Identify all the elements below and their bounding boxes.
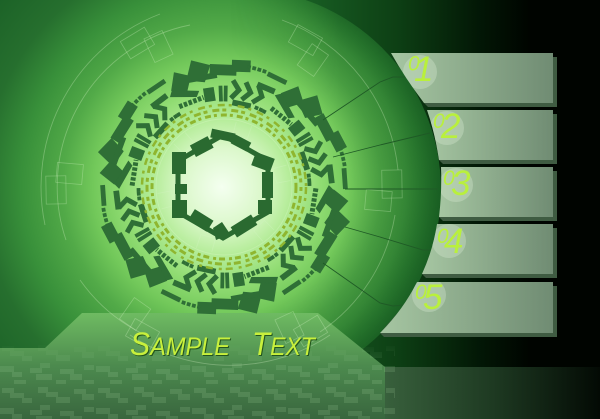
floor trapezoid (0, 313, 385, 419)
dark right background outside the large circle (240, 0, 600, 419)
panel 1 (391, 50, 557, 107)
panel 1: 1 (414, 50, 433, 89)
panel 4: 0 (437, 225, 449, 248)
panel 4: 4 (444, 222, 463, 261)
circular ring of dark tech segments (33, 1, 415, 373)
panel 5: 5 (423, 278, 443, 317)
panel 3: 3 (451, 164, 471, 203)
panel 4 (422, 222, 557, 278)
panel 2 (427, 107, 557, 164)
panel 2: 2 (440, 107, 460, 146)
panel 2: 0 (433, 110, 445, 133)
panel 5 (380, 278, 557, 337)
olive dotted ring (142, 105, 306, 269)
title: sample text: TEXT (252, 326, 317, 362)
dark floor band on the right (385, 367, 600, 419)
title: sample text: SAMPLE (131, 327, 231, 363)
panel 5: 0 (415, 281, 427, 304)
panel 3: 0 (443, 167, 455, 190)
title: sample text (130, 326, 318, 363)
pixel texture on the floor (0, 352, 395, 419)
panel 3 (439, 164, 557, 221)
faint technical rings (41, 14, 398, 365)
title: sample text: SAMPLE (130, 326, 230, 362)
darkening at the right edge of the large circle (264, 0, 441, 349)
inner ragged hexagon (172, 129, 275, 240)
title: sample text: TEXT (253, 327, 318, 363)
connector lines (323, 77, 438, 306)
panel 1: 0 (408, 52, 420, 76)
